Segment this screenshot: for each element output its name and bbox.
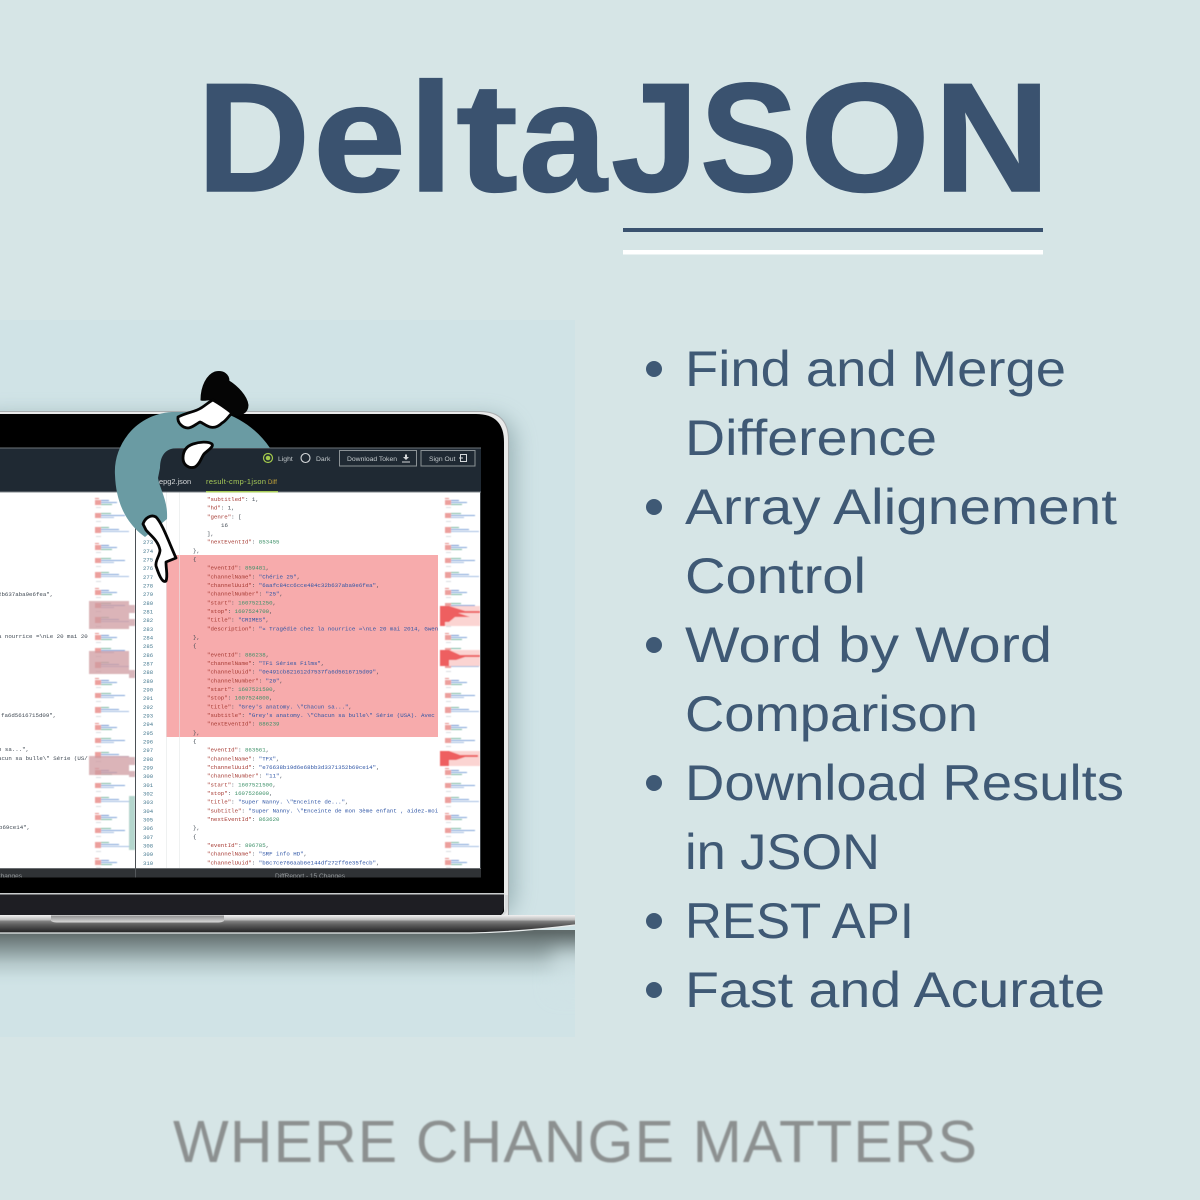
JSON code: "start": 1607521500, — [207, 686, 276, 693]
JSON code: "channelName": "TF1 Séries Films", — [207, 660, 324, 667]
download token button — [340, 450, 416, 466]
left diff pane: fa6d5616715d09", — [1, 712, 56, 719]
JSON code: "channelNumber": "25", — [207, 590, 283, 598]
theme radio dark: Dark — [316, 456, 331, 463]
line numbers — [143, 539, 154, 867]
line numbers: 290 — [143, 686, 154, 694]
line numbers: 308 — [143, 842, 153, 850]
line numbers: 278 — [143, 582, 153, 590]
trackpad notch — [51, 916, 224, 922]
JSON code: "stop": 1607526000, — [207, 790, 273, 797]
title: t — [456, 51, 518, 224]
bullet: download results: Download Results — [685, 755, 1124, 811]
line numbers: 299 — [143, 764, 153, 772]
left diff pane: a nourrice =\nLe 20 mai 20 — [0, 633, 88, 640]
feature list — [646, 341, 1124, 1018]
theme radio dark — [301, 454, 331, 463]
JSON code: 16 — [221, 522, 228, 529]
laptop lid shadow — [0, 416, 515, 919]
laptop base shadow — [0, 930, 575, 976]
panel: laptop screenshot — [0, 371, 575, 984]
JSON code: "hd": 1, — [207, 504, 235, 512]
left diff pane — [0, 492, 135, 868]
theme radio light — [264, 454, 293, 463]
JSON code: "start": 1607521500, — [207, 782, 276, 788]
JSON code: }, — [193, 548, 200, 554]
file tabs: epg2.json — [159, 477, 191, 486]
title: J — [611, 51, 699, 224]
line numbers: 293 — [143, 712, 153, 720]
file tabs — [159, 478, 277, 486]
line numbers: 280 — [143, 600, 154, 607]
app status bar — [0, 868, 481, 878]
JSON code: "start": 1607521250, — [207, 600, 276, 606]
line numbers: 274 — [143, 548, 154, 555]
bullet: array alignment: Array Alignement — [685, 479, 1117, 535]
right diff pane — [136, 492, 480, 868]
title: D — [197, 51, 310, 224]
left minimap — [89, 492, 135, 868]
app header bar — [0, 448, 481, 492]
line numbers: 275 — [143, 556, 153, 564]
line numbers: 305 — [143, 816, 153, 824]
line numbers: 296 — [143, 738, 153, 746]
JSON code: "genre": [ — [207, 514, 242, 520]
JSON code: "eventId": 859481, — [207, 564, 269, 572]
right minimap — [440, 492, 480, 868]
title: l — [409, 51, 453, 224]
download token button: Download Token — [347, 456, 397, 463]
JSON code: "nextEventId": 886239 — [207, 720, 280, 728]
title: e — [313, 51, 406, 224]
JSON code: "nextEventId": 853455 — [207, 538, 280, 546]
line numbers: 309 — [143, 851, 153, 858]
line numbers: 304 — [143, 808, 154, 815]
JSON code: "subtitle": "Super Nanny. \"Enceinte de mon 3ème enfant , aidez-moi — [207, 808, 439, 814]
line numbers: 288 — [143, 669, 153, 676]
JSON code: }, — [193, 730, 200, 736]
title: a — [519, 51, 609, 224]
JSON code: "eventId": 896785, — [207, 842, 269, 849]
line numbers: 283 — [143, 626, 153, 633]
JSON code: "channelName": "TFX", — [207, 756, 279, 762]
line numbers: 306 — [143, 825, 153, 832]
JSON code: "nextEventId": 863620 — [207, 816, 280, 823]
JSON code — [193, 496, 439, 866]
title: N — [934, 51, 1050, 224]
line numbers: 282 — [143, 617, 153, 624]
theme radio light: Light — [278, 456, 293, 463]
bullet: find and merge: Difference — [685, 410, 937, 466]
title — [197, 51, 1050, 224]
bullet: word by word: Word by Word — [685, 617, 1052, 673]
JSON code: "subtitled": 1, — [207, 496, 259, 503]
lower hand — [143, 516, 176, 581]
JSON code: "title": "Grey's anatomy. \"Chacun sa...", — [207, 704, 352, 710]
JSON code: ], — [207, 530, 214, 538]
JSON code: "channelUuid": "6aafc84cc6cce484c32b637aba9e6fea", — [207, 582, 380, 589]
JSON code: "stop": 1607524800, — [207, 694, 273, 702]
line numbers: 292 — [143, 704, 153, 711]
sign out button: Sign Out — [429, 456, 456, 463]
line numbers: 300 — [143, 773, 154, 780]
line numbers: 298 — [143, 756, 153, 763]
file tabs: result-cmp-1json — [206, 477, 266, 486]
bullet: word by word: Comparison — [685, 686, 978, 742]
line numbers: 303 — [143, 799, 153, 806]
JSON code: "channelNumber": "20", — [207, 678, 283, 684]
tagline: WHERE CHANGE MATTERS — [173, 1109, 977, 1175]
line numbers: 310 — [143, 860, 154, 867]
JSON code: "channelName": "SRF info HD", — [207, 850, 307, 858]
line numbers: 294 — [143, 721, 154, 728]
JSON code: "description": "« Tragédie chez la nourrice »\nLe 20 mai 2014, Gwen — [207, 626, 438, 632]
line numbers: 301 — [143, 782, 154, 789]
title: S — [700, 51, 798, 224]
title: O — [800, 51, 930, 224]
character leaning over laptop — [115, 372, 270, 581]
JSON code: { — [193, 834, 196, 840]
laptop lid — [0, 411, 509, 916]
line numbers: 307 — [143, 834, 153, 841]
JSON code: "channelUuid": "e76638b19d6e68bb3d3371352b69ce14", — [207, 764, 380, 771]
JSON code: }, — [193, 824, 200, 832]
line numbers: 279 — [143, 591, 153, 598]
bullet: find and merge — [646, 341, 1066, 466]
app status bar: DiffReport - 15 Changes — [275, 873, 346, 880]
line numbers: 285 — [143, 643, 153, 650]
line numbers: 273 — [143, 539, 153, 546]
JSON code: "stop": 1607524700, — [207, 608, 273, 615]
deleted block highlight — [166, 555, 438, 737]
bullet: fast and accurate: Fast and Acurate — [685, 962, 1105, 1018]
hair — [201, 372, 248, 416]
application screen — [0, 448, 481, 886]
line numbers: 286 — [143, 652, 153, 659]
line numbers: 291 — [143, 695, 154, 702]
JSON code: "title": "CRIMES", — [207, 616, 269, 624]
upper hand — [183, 442, 212, 468]
JSON code: }, — [193, 634, 200, 641]
line numbers: 295 — [143, 730, 153, 737]
line numbers: 284 — [143, 634, 154, 642]
left diff pane: acun sa bulle\" Série (US/ — [0, 755, 88, 762]
line numbers: 302 — [143, 790, 153, 798]
line numbers: 276 — [143, 565, 153, 572]
face — [178, 400, 232, 428]
JSON code: { — [193, 556, 196, 563]
body and arm — [115, 412, 270, 537]
bullet: find and merge: Find and Merge — [685, 341, 1066, 397]
bullet: array alignment: Control — [685, 548, 866, 604]
JSON code: "eventId": 886238, — [207, 652, 269, 658]
JSON code: "subtitle": "Grey's anatomy. \"Chacun sa bulle\" Série (USA). Avec — [207, 712, 435, 719]
line numbers: 281 — [143, 608, 154, 616]
title underline — [623, 228, 1043, 254]
file tabs: Diff — [268, 480, 277, 486]
JSON code: "eventId": 863561, — [207, 746, 269, 754]
bullet: array alignment — [646, 479, 1117, 604]
sign out button — [421, 450, 475, 466]
bullet: download results — [646, 755, 1124, 880]
line numbers: 297 — [143, 747, 153, 754]
bullet: download results: in JSON — [685, 824, 880, 880]
laptop base — [0, 895, 575, 933]
JSON code: "channelName": "Chérie 25", — [207, 574, 300, 580]
JSON code: "channelNumber": "11", — [207, 772, 283, 780]
bullet: word by word — [646, 617, 1052, 742]
line numbers: 287 — [143, 660, 153, 668]
JSON code: { — [193, 642, 196, 650]
JSON code: "channelUuid": "b8c7ce766aab6e144df272ff6e35fecb", — [207, 860, 380, 866]
JSON code: { — [193, 738, 196, 745]
JSON code: "channelUuid": "0e491cb821612d7537fa6d5616715d09", — [207, 668, 380, 676]
line numbers: 277 — [143, 574, 153, 581]
JSON code: "title": "Super Nanny. \"Enceinte de...", — [207, 798, 348, 806]
bullet: rest api: REST API — [685, 893, 914, 949]
line numbers: 289 — [143, 678, 153, 685]
